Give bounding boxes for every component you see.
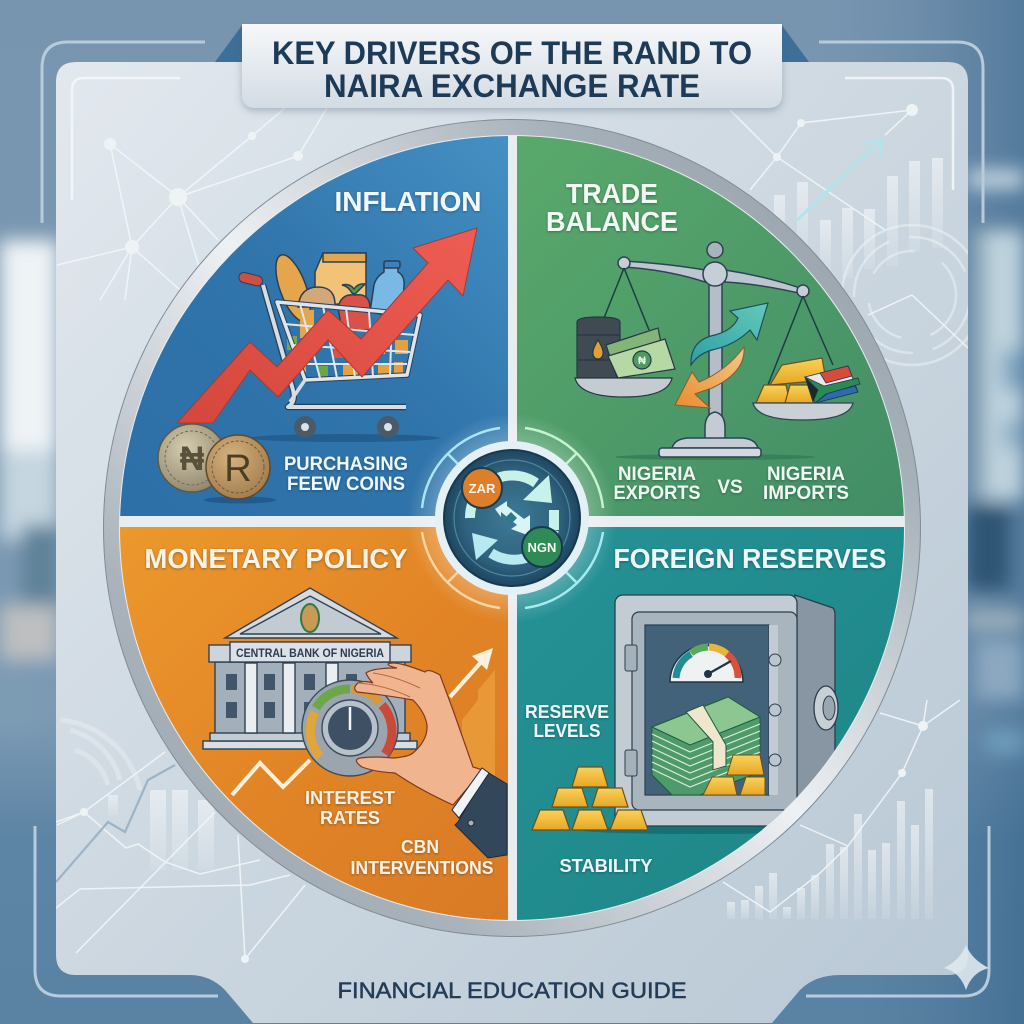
- center medallion: [407, 413, 617, 623]
- text: purchasing few coins: FEEW COINS: [287, 474, 405, 495]
- heading: trade balance: BALANCE: [546, 206, 678, 237]
- badge: ZAR: [462, 468, 502, 508]
- badge: NGN: NGN: [528, 540, 556, 555]
- cart items: [287, 310, 408, 378]
- icon: central bank building: CENTRAL BANK OF NIGERIA: [236, 648, 384, 660]
- text: stability: STABILITY: [560, 856, 652, 876]
- text: cbn interventions: INTERVENTIONS: [350, 858, 494, 878]
- text: nigeria exports: EXPORTS: [614, 483, 700, 504]
- icon: balance scale: [604, 242, 833, 460]
- heading: foreign reserves: FOREIGN RESERVES: [614, 543, 886, 574]
- icon: vault safe: [580, 595, 838, 834]
- icon: rand coin: [204, 435, 276, 504]
- background network and chart decoration: [56, 104, 982, 963]
- groceries: [269, 251, 404, 330]
- cart basket: [263, 285, 420, 407]
- text: versus: VS: [717, 477, 743, 498]
- text: cbn interventions: CBN: [401, 837, 439, 857]
- heading: trade balance: [546, 178, 678, 237]
- heading: trade balance: TRADE: [566, 178, 658, 209]
- gold bars inside safe: [703, 755, 765, 795]
- text: interest rates: INTEREST: [305, 788, 395, 808]
- chart: rising line and bars: [232, 648, 495, 840]
- title banner: NAIRA EXCHANGE RATE: [324, 68, 700, 104]
- icon: rand coin: R: [224, 448, 252, 490]
- panel: trade balance: [517, 130, 905, 516]
- icon: oil barrel and naira notes on left pan: ₦: [638, 355, 646, 367]
- icon: shopping cart with groceries: [238, 251, 440, 442]
- icon: interest rate dial: [302, 680, 398, 776]
- text: nigeria imports: IMPORTS: [763, 483, 849, 504]
- panel: foreign reserves: [517, 527, 905, 920]
- panel: inflation: [120, 130, 508, 516]
- text: interest rates: [305, 788, 395, 828]
- heading: inflation: INFLATION: [334, 186, 482, 217]
- icon: naira coin: [158, 424, 226, 492]
- title banner: [215, 24, 809, 108]
- circular frame: [103, 119, 921, 937]
- text: reserve levels: [525, 702, 609, 741]
- icon: exchange arrows: [675, 303, 768, 408]
- icon: oil barrel and naira notes on left pan: [575, 317, 675, 397]
- text: purchasing few coins: [284, 454, 408, 495]
- text: nigeria imports: [763, 464, 849, 504]
- icon: central bank building: [203, 588, 417, 749]
- text: cbn interventions: [350, 837, 494, 878]
- text: nigeria exports: NIGERIA: [618, 464, 696, 485]
- text: nigeria imports: NIGERIA: [767, 464, 845, 485]
- icon: suit sleeve: [452, 768, 507, 858]
- badge: ZAR: ZAR: [469, 481, 496, 496]
- icon: corner sparkle: [944, 945, 989, 990]
- crest: [301, 604, 319, 632]
- footer text: FINANCIAL EDUCATION GUIDE: [338, 978, 686, 1003]
- icon: naira coin: ₦: [180, 440, 205, 478]
- exchange arrows: [470, 475, 554, 560]
- icon: hand turning dial: [355, 663, 483, 805]
- text: reserve levels: LEVELS: [534, 721, 600, 741]
- heading: monetary policy: MONETARY POLICY: [144, 543, 408, 574]
- badge: NGN: [522, 527, 562, 567]
- text: purchasing few coins: PURCHASING: [284, 454, 408, 475]
- text: interest rates: RATES: [320, 808, 380, 828]
- glow arcs and ticks: [422, 428, 603, 608]
- icon: gold bars and South African flag on right pan: [753, 358, 860, 420]
- gauge: [670, 646, 743, 682]
- cash stack: [652, 697, 760, 795]
- text: reserve levels: RESERVE: [525, 702, 609, 722]
- icon: gold bar pyramid: [532, 767, 648, 830]
- panel: monetary policy: [120, 527, 508, 920]
- text: nigeria exports: [614, 464, 700, 504]
- title banner: KEY DRIVERS OF THE RAND TO: [272, 35, 752, 71]
- icon: rising red arrow: [177, 228, 477, 423]
